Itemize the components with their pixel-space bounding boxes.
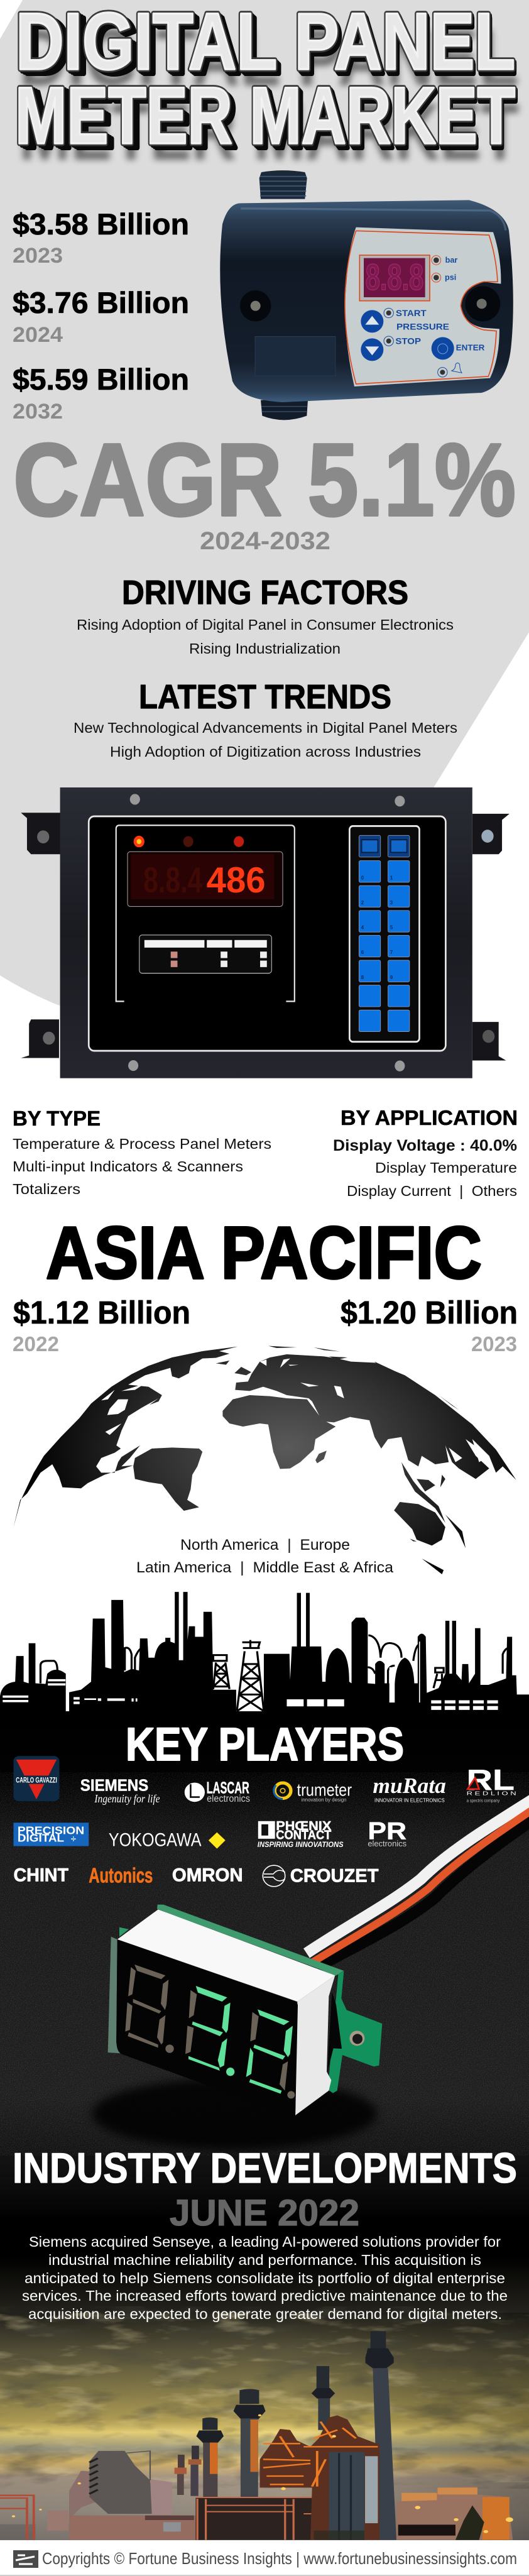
logo: Chint: CHINT	[13, 1865, 68, 1885]
region stat 2022: $1.12 Billion	[13, 1295, 190, 1330]
logo: Trumeter: trumeter	[297, 1780, 352, 1799]
product image: pressure controller: START	[396, 308, 427, 318]
region stat 2023	[341, 1295, 518, 1356]
title	[15, 0, 519, 177]
development description: acquisition are expected to generate greater demand for digital meters.	[28, 2306, 502, 2322]
product image: pressure controller: PRESSURE	[396, 321, 449, 331]
product image: panel meter unit: 8.8.4	[143, 860, 202, 900]
logo: Precision Digital	[13, 1822, 89, 1846]
product image: pressure controller: STOP	[395, 336, 421, 346]
development description: services. The increased efforts toward predictive maintenance due to the	[22, 2288, 508, 2304]
stat: 2023 market size: 2023	[13, 244, 63, 268]
product image: panel meter unit: 2	[361, 899, 364, 906]
stat: 2032 market size: $5.59 Billion	[13, 363, 189, 396]
by application list	[333, 1137, 517, 1199]
world map globe	[13, 1346, 516, 1574]
logo: Precision Digital: PRECISION	[18, 1824, 84, 1837]
logo: Yokogawa: YOKOGAWA	[109, 1830, 202, 1850]
other regions list	[136, 1537, 394, 1576]
product image: pressure controller: ENTER	[456, 343, 485, 353]
product image: panel meter unit: 1	[390, 874, 393, 880]
CAGR period: 2024-2032	[200, 527, 330, 555]
stat: 2024 market size	[13, 286, 189, 347]
logo: Murata: muRata	[373, 1773, 446, 1798]
product image: panel meter unit: 486	[207, 860, 266, 900]
other regions list: North America | Europe	[180, 1537, 350, 1554]
product image: small green voltmeter	[92, 1905, 382, 2149]
industrial skyline silhouette	[0, 1592, 529, 1712]
product image: pressure controller: psi	[445, 273, 456, 282]
logo: Red Lion: R E D L I O N	[467, 1790, 516, 1796]
stat: 2024 market size: 2024	[13, 323, 63, 347]
region stat 2022: 2022	[13, 1332, 59, 1356]
logo: PR electronics: PR	[368, 1817, 406, 1844]
by application heading: BY APPLICATION	[341, 1106, 518, 1129]
stat: 2024 market size: $3.76 Billion	[13, 286, 189, 319]
by type list: Multi-input Indicators & Scanners	[13, 1158, 243, 1175]
by application list: Display Voltage : 40.0%	[333, 1137, 517, 1154]
logo: Lascar electronics	[185, 1779, 250, 1804]
logo: Omron: OMRON	[172, 1865, 243, 1885]
company logos	[13, 1756, 516, 1888]
logo: Siemens: Ingenuity for life	[94, 1793, 160, 1806]
development description: anticipated to help Siemens consolidate its portfolio of digital enterprise	[25, 2270, 505, 2286]
product image: pressure controller	[220, 170, 513, 420]
by type heading: BY TYPE	[13, 1107, 101, 1130]
logo: Crouzet	[263, 1865, 379, 1887]
by type list: Totalizers	[13, 1181, 80, 1197]
logo: Red Lion: RL	[467, 1763, 515, 1796]
logo: Trumeter: innovation by design	[302, 1797, 347, 1803]
dark textured background	[0, 1711, 529, 2264]
logo: Trumeter	[274, 1780, 352, 1803]
driving factors heading: DRIVING FACTORS	[122, 574, 408, 611]
logo: Red Lion	[467, 1763, 516, 1804]
latest trends list: New Technological Advancements in Digital Panel Meters	[74, 720, 457, 736]
product image: panel meter unit: 8	[361, 974, 364, 980]
product image: panel meter unit: 9	[390, 974, 393, 980]
latest trends list: High Adoption of Digitization across Industries	[110, 743, 421, 760]
product image: panel meter unit: 3	[390, 899, 393, 906]
logo: Carlo Gavazzi	[13, 1756, 60, 1801]
by application list: Display Current | Others	[347, 1183, 517, 1199]
logo: Siemens	[80, 1776, 160, 1806]
product image: panel meter unit: 6	[361, 949, 364, 955]
development description: industrial machine reliability and performance. This acquisition is	[48, 2252, 481, 2268]
logo: PR electronics: electronics	[368, 1839, 407, 1848]
product image: panel meter unit	[21, 787, 510, 1078]
development date: JUNE 2022	[170, 2193, 359, 2233]
product image: pressure controller: 8.8.8	[366, 257, 423, 298]
product image: panel meter unit: 0	[361, 874, 364, 880]
development description	[22, 2233, 508, 2322]
grey angular background shape	[0, 0, 529, 1006]
latest trends heading: LATEST TRENDS	[139, 678, 391, 716]
driving factors list: Rising Industrialization	[189, 640, 341, 657]
driving factors list	[77, 617, 454, 657]
product image: wires behind voltmeter	[307, 1799, 529, 1967]
key players heading: KEY PLAYERS	[126, 1718, 404, 1770]
product image: panel meter unit: 7	[390, 949, 393, 955]
logo: Red Lion: a spectris company	[467, 1798, 499, 1804]
product image: pressure controller: bar	[445, 256, 457, 265]
logo: Siemens: SIEMENS	[80, 1776, 148, 1794]
stat: 2023 market size: $3.58 Billion	[13, 207, 189, 241]
logo: Precision Digital: DIGITAL	[18, 1832, 64, 1844]
region stat 2023: 2023	[471, 1332, 517, 1356]
stat: 2023 market size	[13, 207, 189, 268]
logo: Lascar electronics: electronics	[207, 1794, 250, 1804]
other regions list: Latin America | Middle East & Africa	[136, 1559, 394, 1576]
development description: Siemens acquired Senseye, a leading AI-powered solutions provider for	[29, 2233, 501, 2250]
logo: Lascar electronics: LASCAR	[207, 1779, 249, 1797]
logo: Precision Digital: ÷	[71, 1834, 76, 1844]
by type list	[13, 1136, 271, 1197]
region heading: Asia Pacific: ASIA PACIFIC	[46, 1212, 482, 1295]
footer	[0, 2540, 529, 2576]
product image: panel meter unit: 4	[361, 924, 364, 931]
driving factors list: Rising Adoption of Digital Panel in Consumer Electronics	[77, 617, 454, 633]
stat: 2032 market size	[13, 363, 189, 424]
by application list: Display Temperature	[375, 1159, 517, 1176]
product image: panel meter unit: 5	[390, 924, 393, 931]
logo: Murata: INNOVATOR IN ELECTRONICS	[374, 1797, 445, 1804]
logo: Crouzet: CROUZET	[290, 1866, 379, 1887]
logo: Phoenix Contact: CONTACT	[276, 1828, 332, 1842]
region stat 2022	[13, 1295, 190, 1356]
logo: Phoenix Contact: INSPIRING INNOVATIONS	[258, 1840, 344, 1849]
region stat 2023: $1.20 Billion	[341, 1295, 518, 1330]
latest trends list	[74, 720, 457, 760]
logo: Carlo Gavazzi: CARLO GAVAZZI	[16, 1776, 57, 1785]
logo: Phoenix Contact: PHŒNIX	[276, 1819, 331, 1833]
sky and power plant photo	[0, 2256, 529, 2540]
logo: Autonics: Autonics	[89, 1865, 153, 1888]
logo: Phoenix Contact	[258, 1819, 344, 1849]
stat: 2032 market size: 2032	[13, 400, 63, 424]
by type list: Temperature & Process Panel Meters	[13, 1136, 271, 1152]
